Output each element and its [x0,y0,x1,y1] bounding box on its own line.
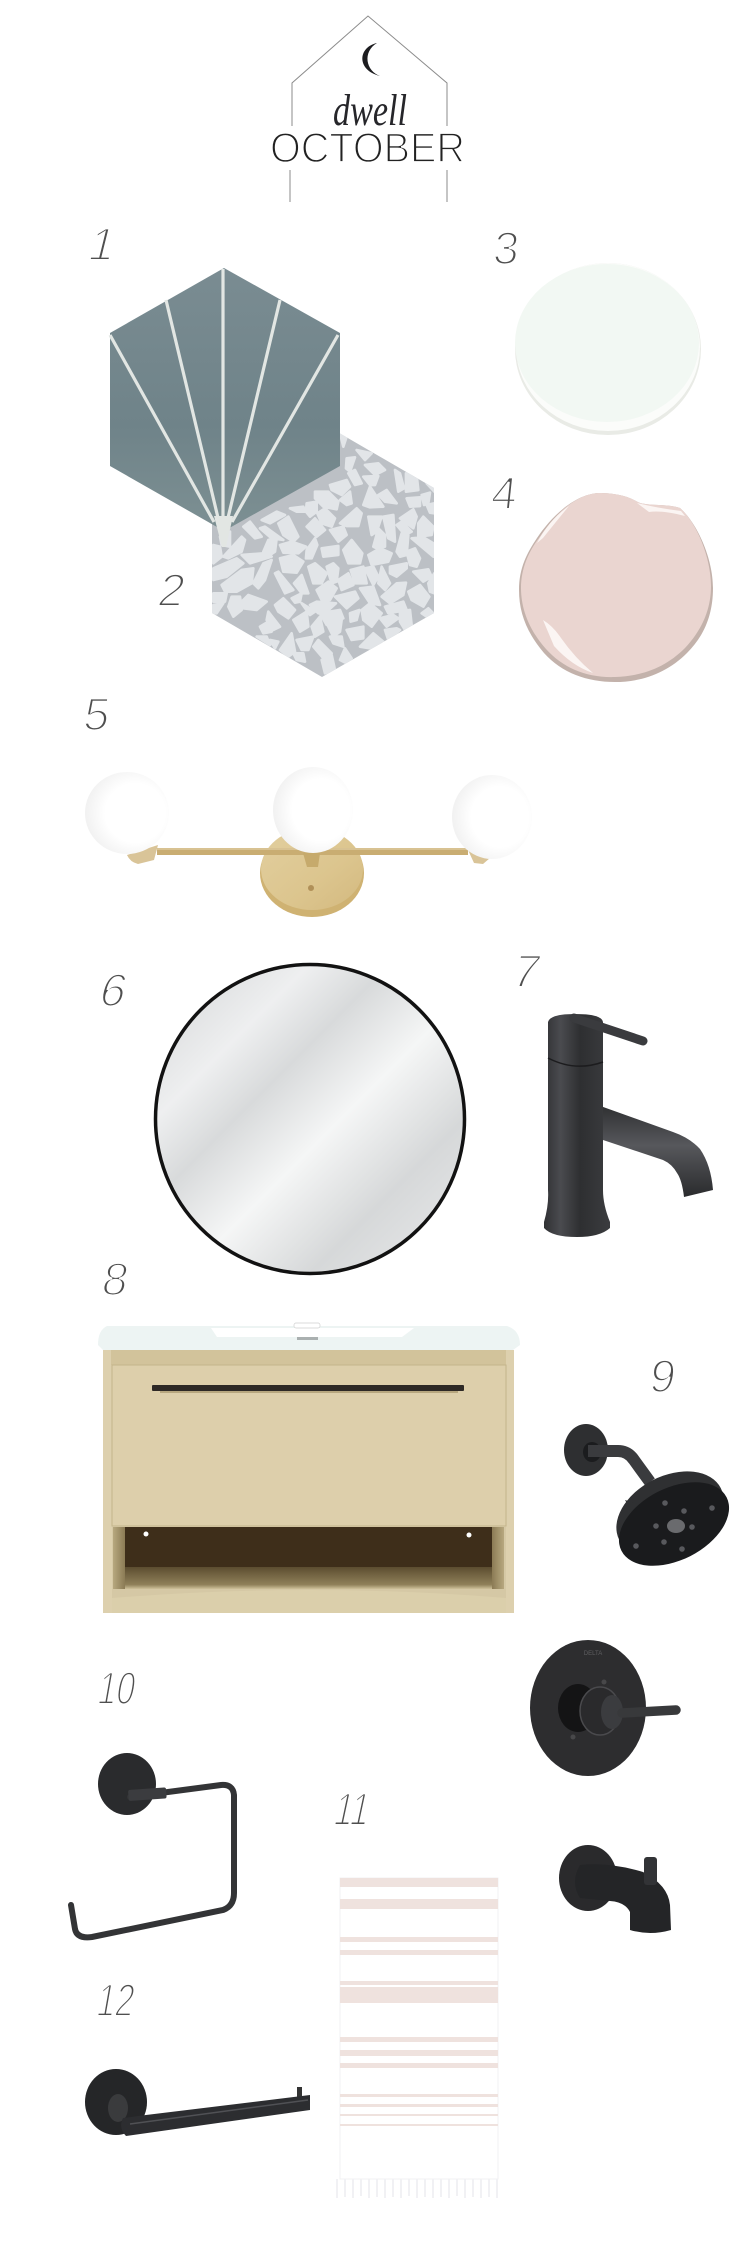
open shelf [112,1527,506,1598]
mounting holes [144,1532,148,1536]
basin [211,1328,414,1337]
label 2: 2 [154,564,190,616]
label 1: 1 [84,219,122,270]
globe cups [127,845,490,864]
faucet body [544,1014,610,1237]
brand mark: DELTA [584,1651,602,1657]
fringe [337,2179,497,2198]
handle [622,1710,676,1713]
drawer front [112,1365,506,1526]
diverter [644,1857,657,1885]
round mirror [156,964,464,1274]
shower valve trim [530,1640,676,1776]
hub [558,1684,598,1732]
cabinet frame [103,1350,514,1613]
tub spout [559,1845,671,1933]
fan rays [110,269,338,525]
towel stripes [340,1878,498,2126]
label 9: 9 [647,1350,679,1402]
base trim [112,1590,506,1613]
nozzles [633,1500,715,1552]
flange [564,1424,608,1476]
hand towel [337,1878,498,2198]
globe shades [85,772,169,854]
head [602,1454,738,1574]
lever [574,1018,643,1041]
drawer handle [152,1385,464,1391]
label 5: 5 [81,688,113,740]
header logo [270,16,465,202]
icon: crescent moon [362,43,380,76]
label 7: 7 [508,946,546,997]
paint highlights [537,503,685,673]
bathroom faucet [544,1014,713,1237]
tile 1: blue fan hexagon [110,268,340,547]
label 6: 6 [95,965,133,1016]
vanity cabinet [98,1323,520,1613]
October title: OCTOBER [270,124,465,171]
dwell script wordmark: dwell [333,86,407,135]
label 4: 4 [489,467,520,519]
label 3: 3 [491,222,522,274]
label 11: 11 [330,1783,375,1835]
fan base wedge [214,516,233,547]
tile 2: terrazzo hexagon [212,434,434,677]
paint swatch 4 [519,493,713,682]
label 12: 12 [93,1974,139,2026]
shower head [564,1424,743,1583]
paint swatch 3 [515,263,701,435]
towel ring [71,1753,234,1937]
label 8: 8 [98,1253,133,1305]
house outline [290,16,447,202]
toilet paper holder [85,2069,310,2136]
arm [588,1451,650,1482]
backplate [260,829,364,917]
countertop [98,1326,520,1350]
arm [157,848,468,855]
spout [580,1103,713,1197]
label 10: 10 [94,1662,140,1714]
wall sconce [85,767,532,917]
